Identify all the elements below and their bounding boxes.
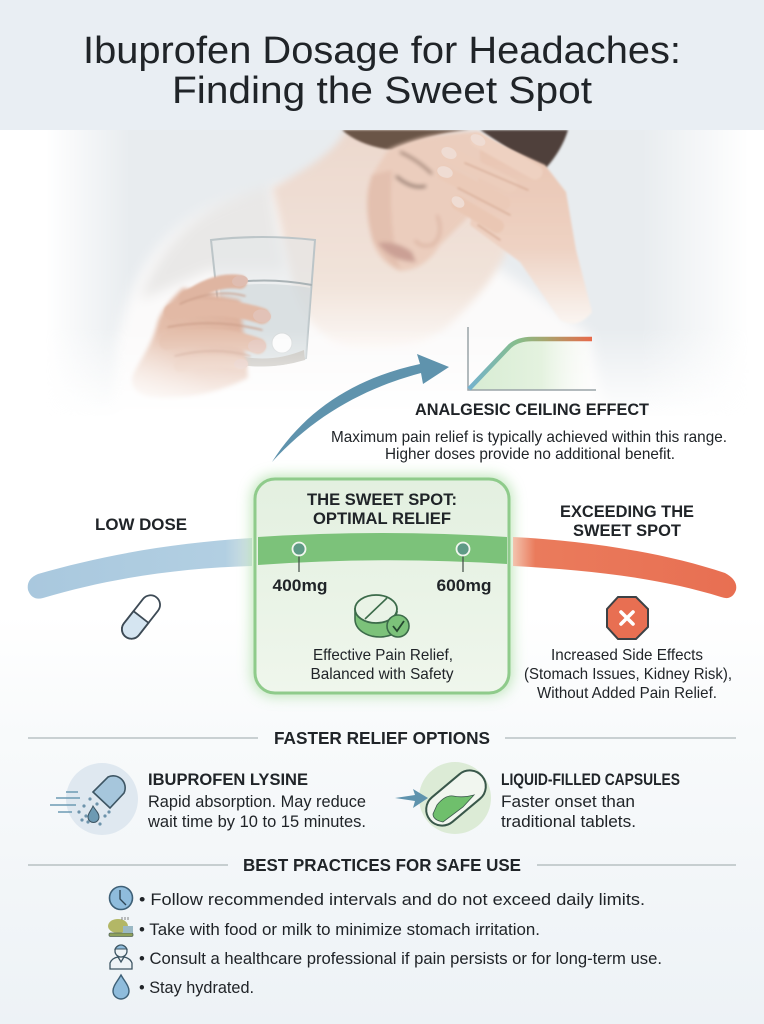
analgesic ceiling text [331,400,727,463]
600mg marker [436,542,492,595]
icon: clock [110,886,132,910]
heading: faster relief options: FASTER RELIEF OPTIONS [274,728,490,748]
title banner [0,0,764,130]
icon: liquid capsule [419,762,492,834]
photo: hair [342,130,568,168]
photo: neck and chest [271,132,506,340]
sweet spot bar [258,533,507,565]
photo: face [366,130,482,272]
photo: hand holding glass [132,274,272,398]
lysine text [147,792,366,831]
low dose label: LOW DOSE [95,515,187,534]
analgesic ceiling text: Higher doses provide no additional benefit. [385,446,675,463]
exceeding text [524,647,732,702]
liquid heading: LIQUID-FILLED CAPSULES [501,770,680,789]
panel: sweet spot [252,476,512,696]
sweet spot text: Effective Pain Relief, [313,647,453,664]
low dose bar [28,538,252,599]
sweet spot card [255,479,509,693]
lysine heading: IBUPROFEN LYSINE [148,770,308,789]
icon: capsule [118,591,164,643]
sweet spot heading: THE SWEET SPOT: [307,490,457,509]
liquid text [501,792,636,831]
panel: best practices list [108,886,662,999]
icon: doctor [110,945,132,969]
panel: ibuprofen lysine [50,763,366,835]
photo: woman with headache holding a glass and pill [76,130,711,397]
sweet spot heading: OPTIMAL RELIEF [313,509,451,528]
arrow [395,789,428,808]
panel: exceeding [513,502,736,702]
practice 2: • Take with food or milk to minimize stomach irritation. [139,920,540,939]
panel: low dose [28,515,252,643]
photo: glass of water with pill [211,237,315,367]
title: Finding the Sweet Spot [172,70,592,112]
exceeding label [560,502,694,540]
exceeding label: EXCEEDING THE [560,502,694,521]
heading: best practices: BEST PRACTICES FOR SAFE USE [243,855,521,875]
sweet spot heading [307,490,457,528]
sweet spot text [310,647,454,683]
liquid text: traditional tablets. [501,812,636,831]
photo: shirt and shoulders [118,240,592,379]
exceeding text: Without Added Pain Relief. [537,685,717,702]
icon: water drop [113,975,129,999]
icon: tablet with check [355,595,409,637]
liquid text: Faster onset than [501,792,635,811]
photo: pill [272,333,292,353]
icon: dissolving capsule [50,763,138,835]
lysine text: Rapid absorption. May reduce [148,792,366,811]
title: Ibuprofen Dosage for Headaches: [83,30,681,72]
analgesic ceiling text: Maximum pain relief is typically achieved within this range. [331,429,727,446]
exceeding label: SWEET SPOT [573,521,682,540]
analgesic ceiling text: ANALGESIC CEILING EFFECT [415,400,650,419]
icon: food plate [108,917,133,936]
practice 1: • Follow recommended intervals and do not exceed daily limits. [139,890,645,909]
icon: stop sign [607,597,648,639]
400mg marker: 400mg [272,576,328,595]
400mg marker [272,542,328,595]
photo: hand on forehead [436,132,592,324]
sweet spot text: Balanced with Safety [310,666,454,683]
exceeding text: (Stomach Issues, Kidney Risk), [524,666,732,683]
title [83,30,681,112]
600mg marker: 600mg [436,576,492,595]
practice 3: • Consult a healthcare professional if pain persists or for long-term use. [139,949,662,968]
chart: analgesic ceiling curve [468,327,596,390]
practice 4: • Stay hydrated. [139,978,254,997]
lysine text: wait time by 10 to 15 minutes. [147,812,366,831]
exceeding bar [513,537,736,598]
panel: liquid-filled capsules [395,762,680,834]
curved arrow to ceiling effect [272,354,449,462]
exceeding text: Increased Side Effects [551,647,703,664]
sweet spot glow [252,476,512,696]
